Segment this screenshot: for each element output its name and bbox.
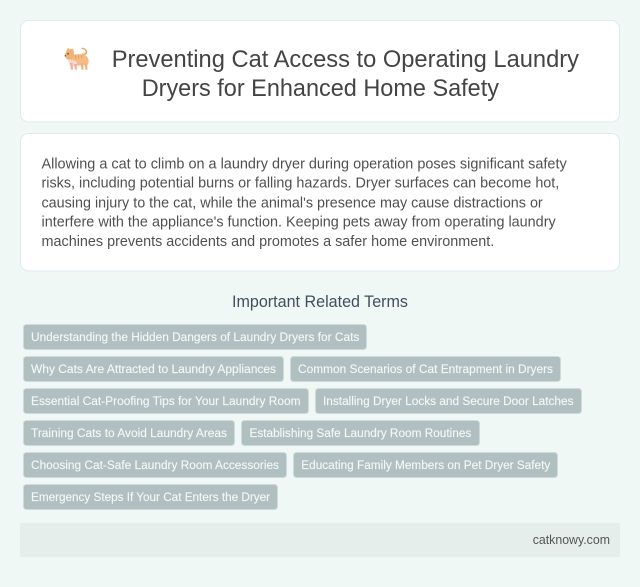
term chip: Establishing Safe Laundry Room Routines bbox=[250, 426, 471, 440]
footer bbox=[20, 523, 620, 557]
term chip bbox=[24, 484, 278, 510]
term chip: Training Cats to Avoid Laundry Areas bbox=[31, 426, 227, 440]
footer source text: catknowy.com bbox=[533, 532, 610, 547]
panel: description card bbox=[20, 134, 620, 271]
panel: important related terms bbox=[24, 293, 582, 510]
term chip bbox=[24, 452, 286, 478]
text block: description: interfere with the appliance's function. Keeping pets away from operating laundry bbox=[42, 215, 556, 231]
text block: description: Allowing a cat to climb on a laundry dryer during operation poses significant safety bbox=[42, 156, 567, 172]
title: Dryers for Enhanced Home Safety bbox=[142, 75, 500, 102]
text block: description: machines prevents accidents and promotes a safer home environment. bbox=[42, 234, 494, 250]
title: Preventing Cat Access to Operating Laundry bbox=[112, 46, 580, 73]
text block: description: causing injury to the cat, while the animal's presence may cause distractions or bbox=[42, 195, 543, 211]
term chip: Educating Family Members on Pet Dryer Safety bbox=[301, 458, 551, 472]
term chip bbox=[24, 356, 284, 382]
icon: cat bbox=[65, 48, 89, 70]
term chip: Common Scenarios of Cat Entrapment in Dryers bbox=[298, 362, 553, 376]
term chip bbox=[24, 388, 308, 414]
term chip: Understanding the Hidden Dangers of Laundry Dryers for Cats bbox=[31, 330, 359, 344]
panel: header card bbox=[20, 20, 620, 122]
text block: description: risks, including potential burns or falling hazards. Dryer surfaces can become hot, bbox=[42, 176, 559, 192]
term chip: Why Cats Are Attracted to Laundry Appliances bbox=[31, 362, 276, 376]
text block: description bbox=[42, 156, 567, 250]
term chip: Choosing Cat-Safe Laundry Room Accessories bbox=[31, 458, 279, 472]
heading: important related terms: Important Related Terms bbox=[232, 293, 408, 311]
title bbox=[112, 46, 580, 102]
term chip bbox=[290, 356, 560, 382]
term chip bbox=[24, 324, 366, 350]
term chip: Essential Cat-Proofing Tips for Your Laundry Room bbox=[31, 394, 300, 408]
term chip: Emergency Steps If Your Cat Enters the Dryer bbox=[31, 490, 270, 504]
term chip: Installing Dryer Locks and Secure Door Latches bbox=[323, 394, 574, 408]
term chip bbox=[294, 452, 558, 478]
term chip bbox=[24, 420, 234, 446]
term chip bbox=[242, 420, 480, 446]
term chip bbox=[316, 388, 582, 414]
